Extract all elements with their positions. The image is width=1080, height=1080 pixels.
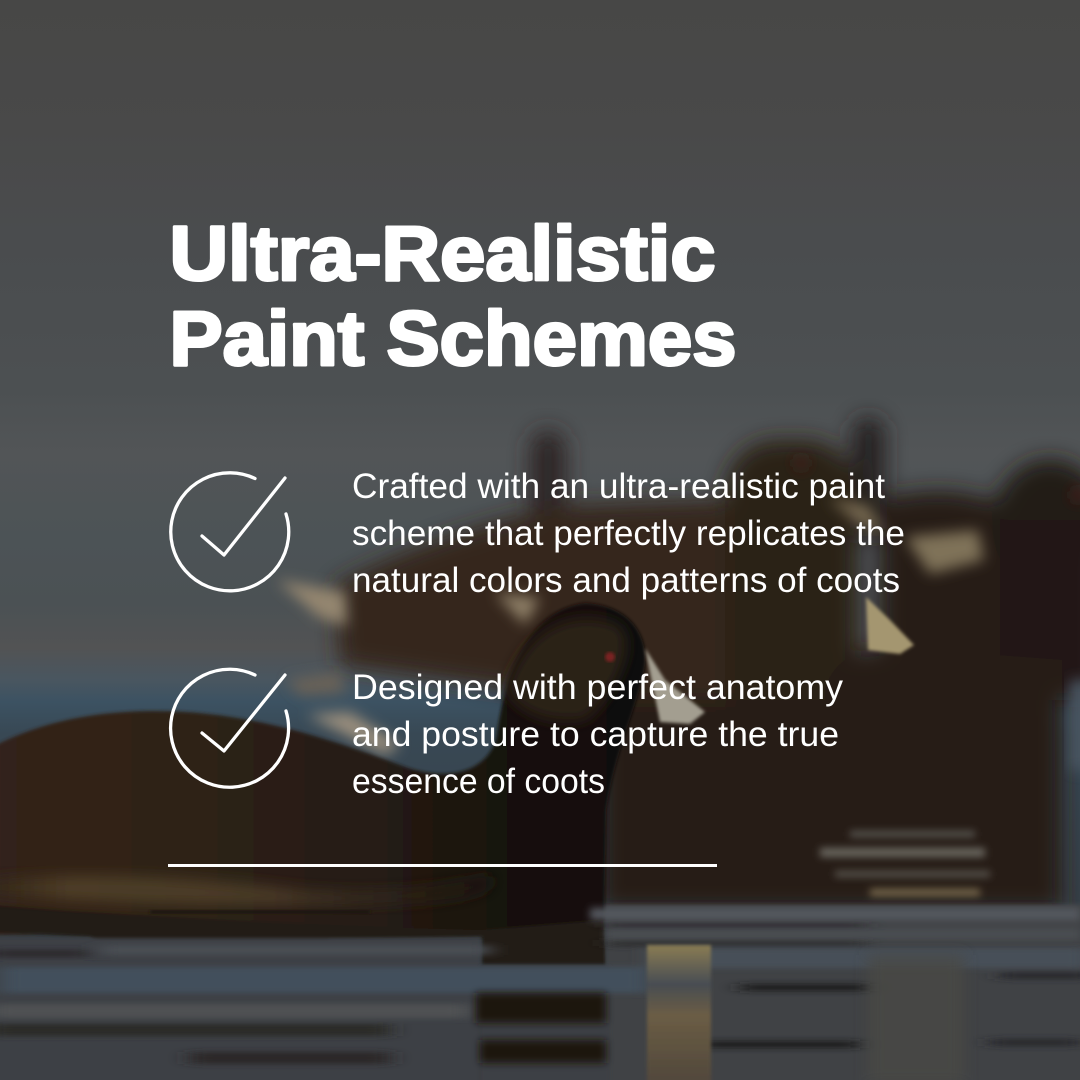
front coot (0, 603, 645, 965)
text block: anatomy benefit: and posture to capture the true (352, 715, 839, 754)
text block: anatomy benefit: essence of coots (352, 762, 605, 801)
title (170, 211, 736, 382)
right edge glint (1070, 680, 1080, 770)
text block: paint scheme benefit: natural colors and patterns of coots (352, 561, 900, 600)
divider line (168, 864, 717, 867)
text block: paint scheme benefit (352, 467, 905, 600)
icon: check in circle 1 (171, 473, 289, 591)
red eyes of back coots (795, 457, 1080, 501)
icon: check in circle 2 (171, 669, 289, 787)
water (0, 905, 1080, 1080)
title: Ultra-Realistic (170, 211, 716, 297)
back row of coots (335, 417, 1080, 910)
text block: paint scheme benefit: Crafted with an ultra-realistic paint (352, 467, 885, 506)
text block: anatomy benefit (352, 668, 843, 801)
dark column reflection (476, 993, 606, 1063)
text block: paint scheme benefit: scheme that perfectly replicates the (352, 514, 905, 553)
surface streaks near right coots (590, 831, 1080, 939)
title: Paint Schemes (170, 296, 736, 382)
text block: anatomy benefit: Designed with perfect anatomy (352, 668, 843, 707)
pale bills of back coots (277, 498, 984, 755)
